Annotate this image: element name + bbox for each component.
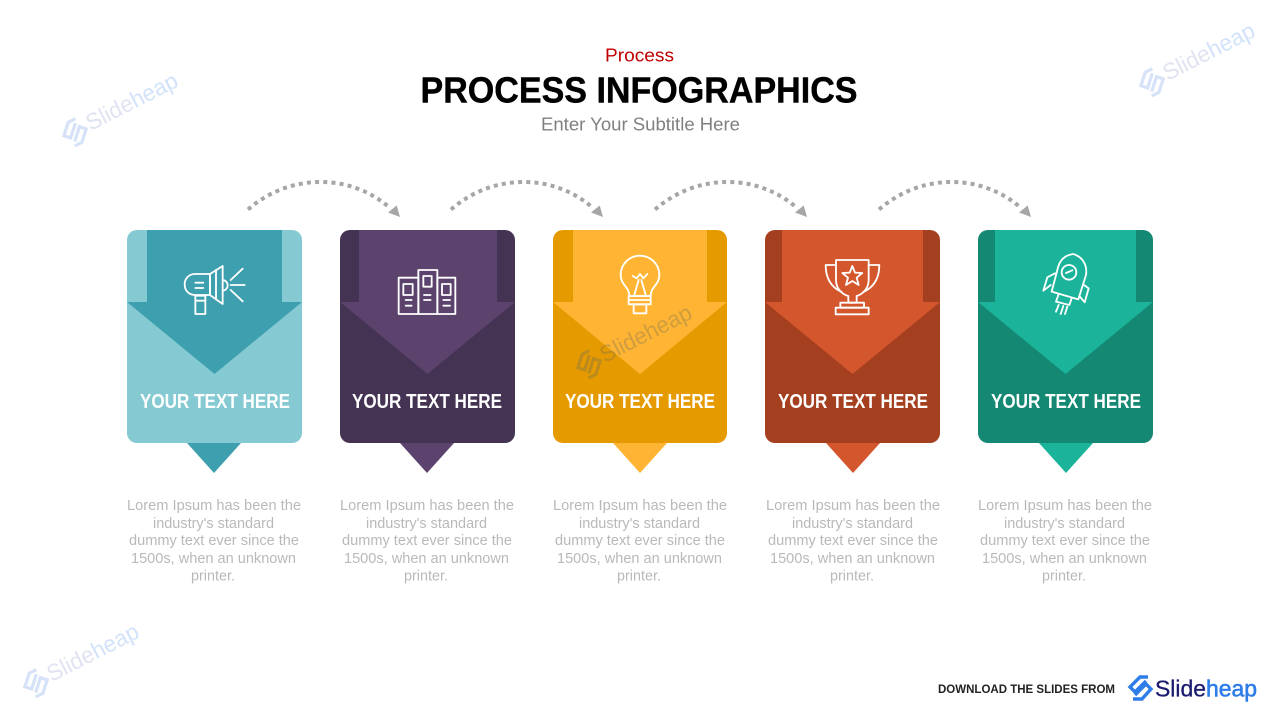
- watermark: top left: [58, 67, 183, 148]
- panel: step 3: [553, 230, 727, 473]
- text block: step 4: [766, 497, 940, 584]
- icon: rocket: [1043, 254, 1089, 314]
- icon: buildings: [399, 270, 455, 314]
- text block: step 3: [553, 497, 727, 584]
- panel: step 4: [765, 230, 940, 473]
- text block: step 1: [127, 497, 301, 584]
- text block: step 5: [978, 497, 1152, 584]
- text block: step 2: dummy text ever since the: [342, 532, 512, 549]
- text block: step 1: dummy text ever since the: [129, 532, 299, 549]
- eyebrow heading: Process: [605, 45, 674, 66]
- watermark: bottom left: [19, 618, 144, 699]
- text block: step 3: Lorem Ipsum has been the: [553, 497, 727, 514]
- label: YOUR TEXT HERE: [352, 391, 502, 413]
- text block: step 5: industry's standard: [1004, 515, 1125, 532]
- text block: step 3: dummy text ever since the: [555, 532, 725, 549]
- text block: step 4: 1500s, when an unknown: [770, 550, 935, 567]
- text block: step 1: industry's standard: [153, 515, 274, 532]
- watermark: center: [572, 299, 697, 380]
- text block: step 4: Lorem Ipsum has been the: [766, 497, 940, 514]
- label: YOUR TEXT HERE: [140, 391, 290, 413]
- arrow: step 1 to 2: [248, 182, 400, 217]
- label: YOUR TEXT HERE: [778, 391, 928, 413]
- arrow: step 4 to 5: [879, 182, 1031, 217]
- icon: light bulb: [621, 256, 659, 313]
- text block: step 5: dummy text ever since the: [980, 532, 1150, 549]
- label: YOUR TEXT HERE: [565, 391, 715, 413]
- panel: step 5: [978, 230, 1153, 473]
- watermark: top right: [1135, 17, 1260, 98]
- watermark: bottom left: Slideheap: [42, 618, 143, 687]
- watermark: top left: Slideheap: [81, 67, 182, 136]
- text block: step 3: industry's standard: [579, 515, 700, 532]
- text block: step 3: printer.: [617, 568, 661, 584]
- text block: step 1: 1500s, when an unknown: [131, 550, 296, 567]
- text block: step 4: printer.: [830, 568, 874, 584]
- icon: megaphone: [185, 266, 245, 314]
- text block: step 5: 1500s, when an unknown: [982, 550, 1147, 567]
- text block: step 2: industry's standard: [366, 515, 487, 532]
- arrow: step 3 to 4: [655, 182, 807, 217]
- text block: step 4: industry's standard: [792, 515, 913, 532]
- text block: step 3: 1500s, when an unknown: [557, 550, 722, 567]
- label: YOUR TEXT HERE: [991, 391, 1141, 413]
- panel: step 2: [340, 230, 515, 473]
- panel: step 1: [127, 230, 302, 473]
- text block: step 5: printer.: [1042, 568, 1086, 584]
- title: PROCESS INFOGRAPHICS: [420, 70, 858, 110]
- watermark: top right: Slideheap: [1158, 17, 1259, 86]
- text block: step 5: Lorem Ipsum has been the: [978, 497, 1152, 514]
- text block: step 4: dummy text ever since the: [768, 532, 938, 549]
- watermark: center: Slideheap: [595, 299, 696, 368]
- text block: step 1: Lorem Ipsum has been the: [127, 497, 301, 514]
- icon: trophy: [826, 260, 879, 314]
- text block: step 1: printer.: [191, 568, 235, 584]
- arrow: step 2 to 3: [451, 182, 603, 217]
- text block: step 2: printer.: [404, 568, 448, 584]
- footer: download credit: DOWNLOAD THE SLIDES FROM: [938, 684, 1115, 696]
- subtitle: Enter Your Subtitle Here: [541, 114, 740, 135]
- footer: download credit: [938, 676, 1257, 702]
- text block: step 2: Lorem Ipsum has been the: [340, 497, 514, 514]
- logo wordmark: Slideheap: [1155, 676, 1257, 702]
- text block: step 2: [340, 497, 514, 584]
- icon: Slideheap logo: [1130, 677, 1151, 699]
- text block: step 2: 1500s, when an unknown: [344, 550, 509, 567]
